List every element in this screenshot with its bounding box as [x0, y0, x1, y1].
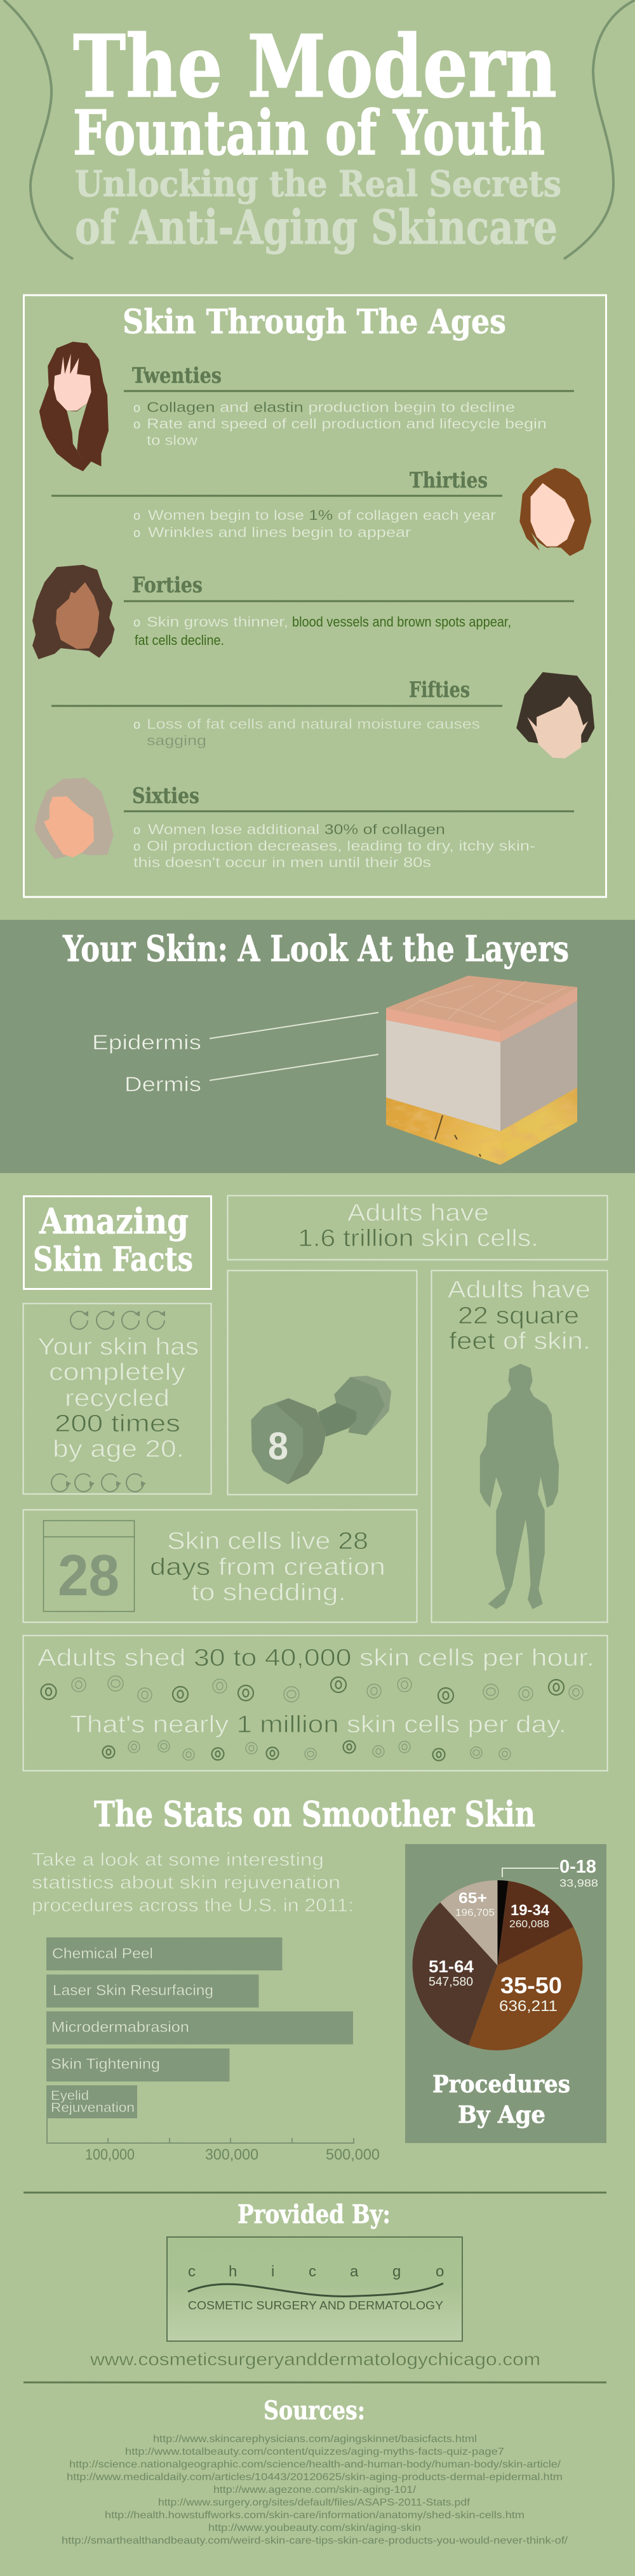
chart axis — [47, 2118, 354, 2143]
heading: twenties: Twenties — [132, 363, 222, 388]
icon row: recycle arrows bottom — [51, 1474, 146, 1492]
fact: square feet of skin: 22 square — [458, 1303, 579, 1329]
axis labels — [85, 2146, 380, 2163]
text: source list: http://smarthealthandbeauty.com/weird-skin-care-tips-skin-care-products-you-would-never-think-of/ — [62, 2535, 568, 2546]
label: epidermis: Epidermis — [92, 1031, 201, 1054]
fact: skin cells count: Adults have — [347, 1200, 489, 1226]
icon: woman with short dark hair — [516, 672, 594, 759]
text: thirties facts: Wrinkles and lines begin to appear — [148, 524, 411, 540]
text: sixties facts: Women lose additional 30% of collagen — [148, 821, 445, 837]
icon: calendar 28 — [43, 1521, 135, 1611]
label: 19-34: 19-34 — [511, 1902, 550, 1919]
fact: skin cells count: 1.6 trillion skin cells. — [298, 1225, 538, 1252]
label: 19-34 — [509, 1902, 550, 1930]
heading: sources: Sources: — [264, 2396, 365, 2426]
section: sixties — [34, 778, 574, 870]
text: sixties facts: this doesn't occur in men until their 80s — [133, 854, 431, 870]
text: source list — [62, 2434, 568, 2546]
fact: shedding skin cells: Adults shed 30 to 40,000 skin cells per hour. — [37, 1645, 594, 1671]
text: fifties facts: o — [133, 718, 140, 732]
text: thirties facts: o — [133, 526, 140, 540]
title box: amazing skin facts — [24, 1196, 211, 1289]
panel: procedures by age — [405, 1844, 606, 2143]
text: sixties facts: Oil production decreases, leading to dry, itchy skin- — [147, 838, 535, 854]
fact: recycled skin: by age 20. — [53, 1436, 184, 1463]
heading: procedures by age: Procedures — [432, 2070, 570, 2098]
icon row: skin cells large — [41, 1676, 583, 1703]
logo: chicago cosmetic surgery and dermatology: o — [436, 2263, 444, 2280]
panel: skin through the ages — [24, 295, 606, 897]
icon: woman with grey hair — [34, 778, 114, 859]
fact: skin cells count — [227, 1196, 607, 1259]
heading: procedures by age — [432, 2070, 570, 2128]
heading: sixties: Sixties — [132, 783, 199, 809]
text: source list: http://www.totalbeauty.com/content/quizzes/aging-myths-facts-quiz-page7 — [125, 2447, 504, 2457]
label: 51-64: 51-64 — [429, 1957, 474, 1976]
label: 35-50: 35-50 — [500, 1972, 562, 1998]
label: 0-18 — [559, 1857, 598, 1889]
arrow: epidermis leader — [210, 1012, 378, 1039]
text: source list: http://science.nationalgeographic.com/science/health-and-human-body/human-body/skin-article/ — [69, 2459, 561, 2470]
heading: thirties: Thirties — [410, 468, 488, 493]
fact: skin cell lifespan: to shedding. — [191, 1579, 346, 1606]
panel: skin layers band — [0, 920, 635, 1173]
illustration: skin layer cube — [386, 976, 577, 1165]
fact: skin cell lifespan: Skin cells live 28 — [167, 1528, 368, 1555]
text: sixties facts — [133, 821, 535, 870]
icon: woman with auburn bob — [519, 468, 591, 556]
label: 65+ — [455, 1890, 495, 1918]
decorative title curves — [4, 0, 635, 259]
heading: skin through the ages: Skin Through The Ages — [123, 303, 506, 342]
text: forties facts: Skin grows thinner, — [147, 614, 288, 630]
text: forties facts — [133, 614, 511, 648]
label: 19-34: 260,088 — [509, 1919, 549, 1930]
label: 0-18: 33,988 — [559, 1877, 598, 1889]
section: thirties — [51, 468, 591, 556]
text: source list: http://www.skincarephysicians.com/agingskinnet/basicfacts.html — [153, 2434, 477, 2445]
bar: eyelid rejuvenation: Rejuvenation — [51, 2101, 135, 2115]
fact: square feet of skin: Adults have — [448, 1277, 591, 1303]
text: stats intro: procedures across the U.S. in 2011: — [32, 1895, 354, 1916]
text: stats intro — [32, 1850, 354, 1916]
logo: chicago cosmetic surgery and dermatology: COSMETIC SURGERY AND DERMATOLOGY — [188, 2299, 443, 2312]
axis labels: 300,000 — [205, 2146, 258, 2163]
fact: recycled skin — [23, 1304, 211, 1494]
section: sources — [62, 2396, 568, 2546]
logo: chicago cosmetic surgery and dermatology: h — [229, 2263, 237, 2280]
title block — [4, 0, 635, 259]
text: twenties facts: Collagen and elastin production begin to decline — [147, 399, 515, 415]
panel: stats on smoother skin — [32, 1793, 606, 2163]
text: sixties facts: o — [133, 823, 140, 837]
heading: fifties: Fifties — [409, 677, 470, 703]
label: 65+: 196,705 — [455, 1908, 495, 1918]
text: twenties facts: o — [133, 418, 140, 432]
bar: skin tightening: Skin Tightening — [51, 2055, 160, 2072]
panel: amazing skin facts — [23, 1196, 607, 1771]
section: provided by — [90, 2200, 540, 2369]
text: thirties facts: Women begin to lose 1% of collagen each year — [148, 507, 496, 523]
heading: procedures by age: By Age — [458, 2101, 545, 2128]
text: twenties facts: o — [133, 401, 140, 415]
fact: recycled skin: completely — [49, 1359, 185, 1386]
text: fifties facts: Loss of fat cells and natural moisture causes — [147, 716, 480, 732]
text: source list: http://health.howstuffworks.com/skin-care/information/anatomy/shed-skin-cells.htm — [105, 2510, 525, 2521]
pie chart — [413, 1880, 582, 2050]
icon: calendar 28: 28 — [58, 1543, 119, 1608]
text: fifties facts: sagging — [147, 733, 206, 748]
fact: recycled skin: Your skin has — [37, 1334, 199, 1360]
label: 35-50 — [499, 1972, 562, 2015]
icon row: recycle arrows top — [70, 1311, 165, 1329]
bar: microdermabrasion: Microdermabrasion — [51, 2019, 189, 2035]
text: source list: http://www.youbeauty.com/skin/aging-skin — [208, 2523, 421, 2533]
fact: square feet of skin — [432, 1271, 607, 1623]
bar: chemical peel — [46, 1937, 282, 1970]
text: source list: http://www.medicaldaily.com/articles/10443/20120625/skin-aging-products-dermal-epidermal.htm — [67, 2472, 563, 2483]
fact: shedding skin cells — [23, 1635, 607, 1771]
subtitle line 1: Unlocking the Real Secrets — [75, 163, 561, 205]
bar: eyelid rejuvenation — [46, 2085, 137, 2118]
label: 51-64 — [429, 1957, 474, 1989]
bar: laser skin resurfacing: Laser Skin Resurfacing — [53, 1982, 213, 1998]
text: stats intro: statistics about skin rejuvenation — [32, 1873, 340, 1893]
logo: chicago cosmetic surgery and dermatology: g — [392, 2263, 401, 2280]
fact: square feet of skin: feet of skin. — [449, 1328, 591, 1355]
section: twenties — [39, 342, 574, 471]
text: thirties facts — [133, 507, 496, 540]
heading: provided by: Provided By: — [237, 2200, 391, 2229]
text: twenties facts — [133, 399, 547, 448]
fact: shedding skin cells: That's nearly 1 million skin cells per day. — [70, 1711, 566, 1738]
icon: woman with long brown hair — [39, 342, 109, 471]
text: thirties facts: o — [133, 509, 140, 523]
label: 0-18: 0-18 — [559, 1857, 596, 1877]
bar: laser skin resurfacing — [46, 1974, 259, 2007]
bar: skin tightening — [46, 2048, 230, 2081]
axis labels: 500,000 — [326, 2146, 380, 2163]
logo: chicago cosmetic surgery and dermatology: c — [188, 2263, 196, 2280]
label: dermis: Dermis — [124, 1073, 201, 1096]
logo: chicago cosmetic surgery and dermatology: a — [350, 2263, 359, 2280]
bar: eyelid rejuvenation: Eyelid — [51, 2088, 89, 2103]
bar chart: procedures — [46, 1937, 380, 2163]
logo: chicago cosmetic surgery and dermatology: i — [271, 2263, 274, 2280]
axis labels: 100,000 — [85, 2146, 135, 2163]
dumbbell weight number: 8 — [268, 1424, 288, 1468]
label: 35-50: 636,211 — [499, 1998, 558, 2015]
text: source list: http://www.surgery.org/sites/default/files/ASAPS-2011-Stats.pdf — [158, 2497, 471, 2508]
logo: chicago cosmetic surgery and dermatology: c — [309, 2263, 316, 2280]
arrow: dermis leader — [210, 1054, 378, 1080]
text: forties facts: o — [133, 616, 140, 630]
icon row: skin cells small — [103, 1741, 511, 1761]
icon: dumbbell — [251, 1376, 391, 1484]
section: fifties — [51, 672, 594, 759]
text: fifties facts — [133, 716, 480, 748]
fact: dumbbell box — [227, 1271, 417, 1494]
leader line: 0-18 — [502, 1868, 559, 1877]
text: forties facts: fat cells decline. — [135, 632, 224, 648]
text: forties facts: blood vessels and brown spots appear, — [292, 614, 511, 630]
fact: skin cell lifespan — [23, 1510, 417, 1623]
bar: microdermabrasion — [46, 2011, 353, 2044]
fact: recycled skin: recycled — [65, 1385, 170, 1412]
text: sixties facts: o — [133, 840, 140, 854]
text: source list: http://www.agezone.com/skin-aging-101/ — [213, 2485, 417, 2495]
heading: forties: Forties — [132, 573, 203, 598]
text: stats intro: Take a look at some interesting — [32, 1850, 324, 1870]
website url: www.cosmeticsurgeryanddermatologychicago.com — [90, 2349, 540, 2369]
text: twenties facts: Rate and speed of cell production and lifecycle begin — [147, 416, 547, 432]
icon: human silhouette — [480, 1364, 559, 1609]
label: 65+: 65+ — [458, 1890, 487, 1907]
label: 51-64: 547,580 — [429, 1975, 473, 1989]
title box: amazing skin facts: Skin Facts — [33, 1240, 193, 1279]
fact: recycled skin: 200 times — [55, 1411, 180, 1437]
fact: skin cell lifespan: days from creation — [150, 1554, 385, 1581]
bar: chemical peel: Chemical Peel — [52, 1945, 153, 1962]
logo: chicago cosmetic surgery and dermatology — [167, 2237, 462, 2341]
icon: woman with dark shoulder hair — [32, 565, 114, 660]
text: twenties facts: to slow — [147, 432, 197, 448]
heading: stats: The Stats on Smoother Skin — [94, 1793, 535, 1835]
title box: amazing skin facts: Amazing — [39, 1200, 189, 1242]
section: forties — [32, 565, 574, 660]
